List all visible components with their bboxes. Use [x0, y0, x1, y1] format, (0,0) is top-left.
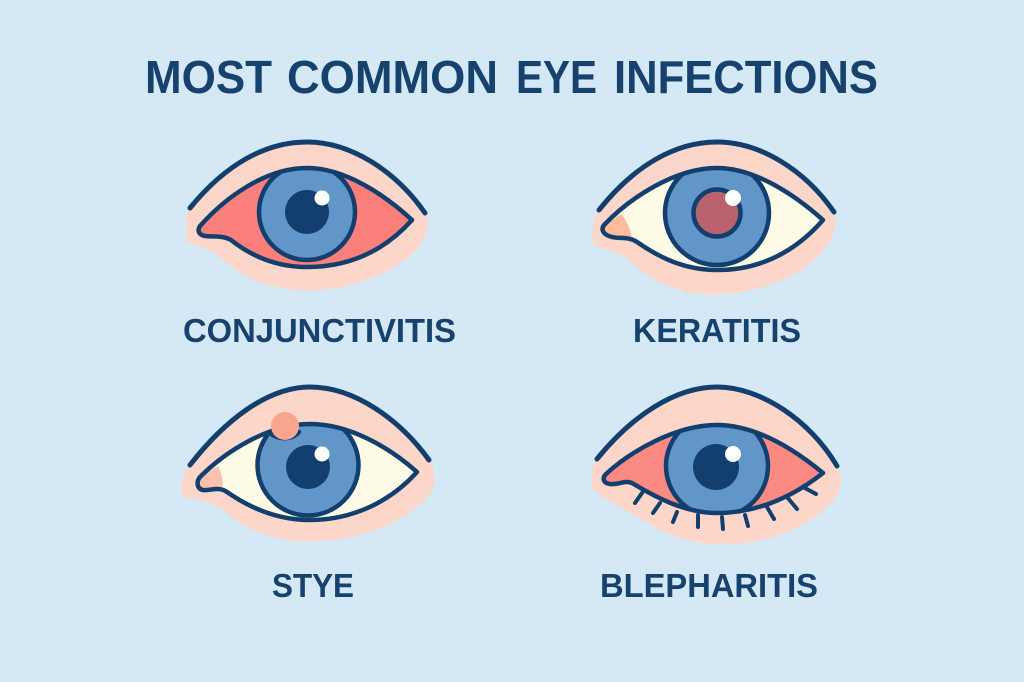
eyelid skin: [593, 388, 839, 543]
eye outline: [199, 168, 412, 267]
eye outline: [198, 424, 417, 520]
highlight: [314, 446, 330, 462]
iris: [664, 427, 770, 511]
title: MOST: [145, 51, 272, 103]
title: INFECTIONS: [614, 51, 878, 103]
red sclera: [199, 168, 412, 267]
eyelashes: [635, 487, 816, 529]
stye outline: [270, 432, 299, 438]
icon: keratitis eye: [594, 142, 834, 293]
highlight: [314, 190, 330, 206]
icon: stye eye: [183, 387, 433, 540]
eyelid skin: [183, 388, 433, 540]
stye bump: [271, 412, 299, 440]
eye white: [198, 424, 417, 520]
label: keratitis: KERATITIS: [633, 312, 801, 349]
iris: [258, 414, 358, 516]
red sclera: [604, 425, 823, 513]
iris: [665, 161, 769, 265]
pupil: [285, 190, 329, 234]
eye outline: [604, 425, 823, 513]
eye white: [603, 168, 823, 270]
caruncle: [604, 214, 632, 239]
brow arc: [190, 387, 429, 465]
eye outline: [603, 168, 823, 270]
highlight: [725, 190, 741, 206]
iris: [259, 164, 355, 260]
caruncle: [199, 466, 223, 490]
pupil: [286, 445, 330, 489]
label: stye: STYE: [272, 567, 354, 604]
title: COMMON: [287, 51, 498, 103]
brow arc: [597, 387, 837, 466]
label: blepharitis: BLEPHARITIS: [600, 567, 818, 604]
infected pupil: [694, 190, 740, 236]
title: EYE: [516, 51, 597, 103]
highlight: [725, 446, 741, 462]
eyelid skin: [594, 143, 834, 293]
brow arc: [599, 142, 834, 212]
icon: conjunctivitis eye: [187, 142, 426, 289]
label: conjunctivitis: CONJUNCTIVITIS: [183, 312, 456, 349]
icon: blepharitis eye: [593, 387, 839, 543]
eyelid skin: [187, 143, 426, 289]
brow arc: [190, 142, 425, 213]
pupil: [693, 444, 739, 490]
